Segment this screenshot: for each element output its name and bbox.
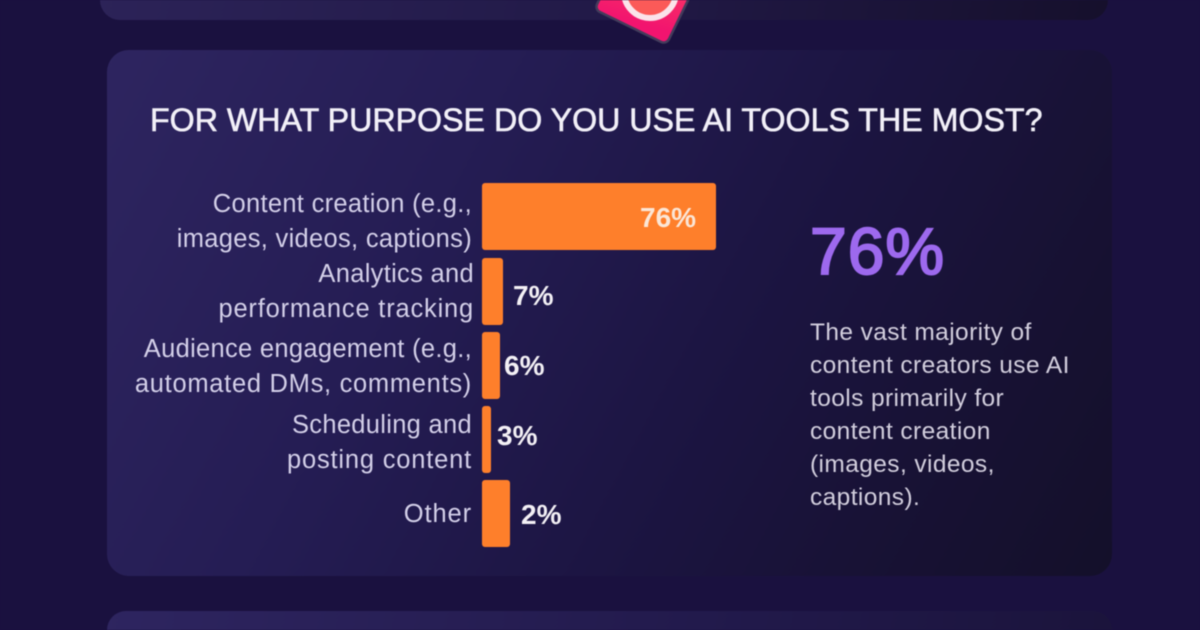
- icon: tilted pink app icon (cropped): [595, 0, 690, 44]
- bar: scheduling 3%: [482, 406, 491, 473]
- stat description: content creation: [810, 418, 991, 445]
- value: 6%: 6%: [504, 350, 544, 381]
- bar: audience engagement 6%: [482, 332, 500, 399]
- category label: content creation: Content creation (e.g.,: [213, 190, 472, 218]
- bar: content creation 76%: [482, 183, 716, 250]
- category label: audience engagement: Audience engagement (e.g.,: [144, 335, 472, 363]
- bar: other 2%: [482, 480, 510, 547]
- category label: content creation: [177, 190, 472, 254]
- stat description: content creators use AI: [810, 352, 1070, 379]
- value: 76%: 76%: [640, 202, 696, 233]
- category label: audience engagement: automated DMs, comments): [135, 370, 472, 398]
- category label: content creation: images, videos, captions): [177, 225, 472, 253]
- category label: analytics: [218, 260, 474, 324]
- stat description: The vast majority of: [810, 319, 1032, 346]
- stat description: (images, videos,: [810, 451, 995, 478]
- category label: scheduling: Scheduling and: [292, 411, 472, 439]
- panel: next section (cropped): [107, 611, 1112, 630]
- value: 2%: 2%: [521, 499, 561, 530]
- category label: scheduling: [287, 411, 472, 474]
- bar: analytics 7%: [482, 258, 503, 325]
- panel: previous section (cropped): [100, 0, 1108, 20]
- category label: other: Other: [404, 500, 472, 528]
- category label: analytics: performance tracking: [218, 295, 474, 323]
- value: 7%: 7%: [513, 280, 553, 311]
- stat description: captions).: [810, 484, 920, 511]
- stat description: tools primarily for: [810, 385, 1004, 412]
- category label: scheduling: posting content: [287, 446, 472, 474]
- heading: FOR WHAT PURPOSE DO YOU USE AI TOOLS THE MOST?: [150, 102, 1042, 138]
- category label: audience engagement: [135, 335, 472, 398]
- big stat: 76%: 76%: [810, 214, 945, 288]
- category label: analytics: Analytics and: [318, 260, 474, 288]
- panel: AI tools purpose: [107, 50, 1112, 576]
- value: 3%: 3%: [497, 420, 537, 451]
- stat description: [810, 319, 1070, 511]
